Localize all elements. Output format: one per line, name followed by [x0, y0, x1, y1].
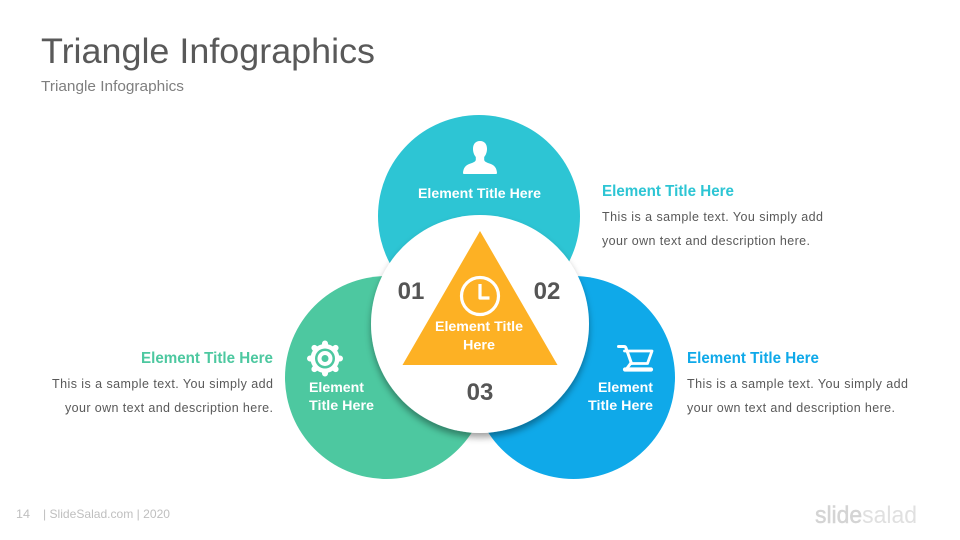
- logo wordmark: slidesalad: [815, 502, 917, 529]
- title: Triangle Infographics: [41, 32, 375, 71]
- text block: left: Element Title Here: [141, 350, 273, 367]
- text block: top right: Element Title Here: [602, 183, 734, 200]
- icon: shopping cart: [618, 346, 652, 370]
- text block: left: This is a sample text. You simply add: [52, 377, 273, 391]
- text block: top right: [602, 183, 823, 248]
- icon: clock: [462, 278, 498, 314]
- green circle label: Title Here: [309, 397, 374, 413]
- text block: right: Element Title Here: [687, 350, 819, 367]
- footer text: | SlideSalad.com | 2020: [43, 507, 170, 521]
- icon: gear: [310, 344, 340, 374]
- top circle label: Element Title Here: [418, 185, 541, 201]
- triangle label: Element Title: [435, 318, 523, 334]
- blue circle label: Title Here: [588, 397, 653, 413]
- number 02: 02: [534, 278, 560, 305]
- panel: blue circle: [472, 276, 675, 479]
- triangle label: Here: [463, 336, 495, 352]
- text block: right: your own text and description here.: [687, 401, 895, 415]
- central orange triangle: [402, 231, 558, 365]
- green circle label: Element: [309, 379, 364, 395]
- text block: left: [52, 350, 273, 415]
- blue circle label: Element: [598, 379, 653, 395]
- text block: right: This is a sample text. You simply add: [687, 377, 908, 391]
- panel: central white circle: [371, 215, 589, 433]
- footer page number: 14: [16, 507, 30, 521]
- panel: green circle: [285, 276, 488, 479]
- icon: person: [463, 141, 497, 174]
- text block: top right: your own text and description here.: [602, 234, 810, 248]
- number 03: 03: [467, 379, 493, 406]
- panel: top teal circle: [378, 115, 580, 317]
- number 01: 01: [398, 278, 424, 305]
- subtitle: Triangle Infographics: [41, 79, 184, 95]
- text block: left: your own text and description here.: [65, 401, 273, 415]
- text block: top right: This is a sample text. You simply add: [602, 210, 823, 224]
- text block: right: [687, 350, 908, 415]
